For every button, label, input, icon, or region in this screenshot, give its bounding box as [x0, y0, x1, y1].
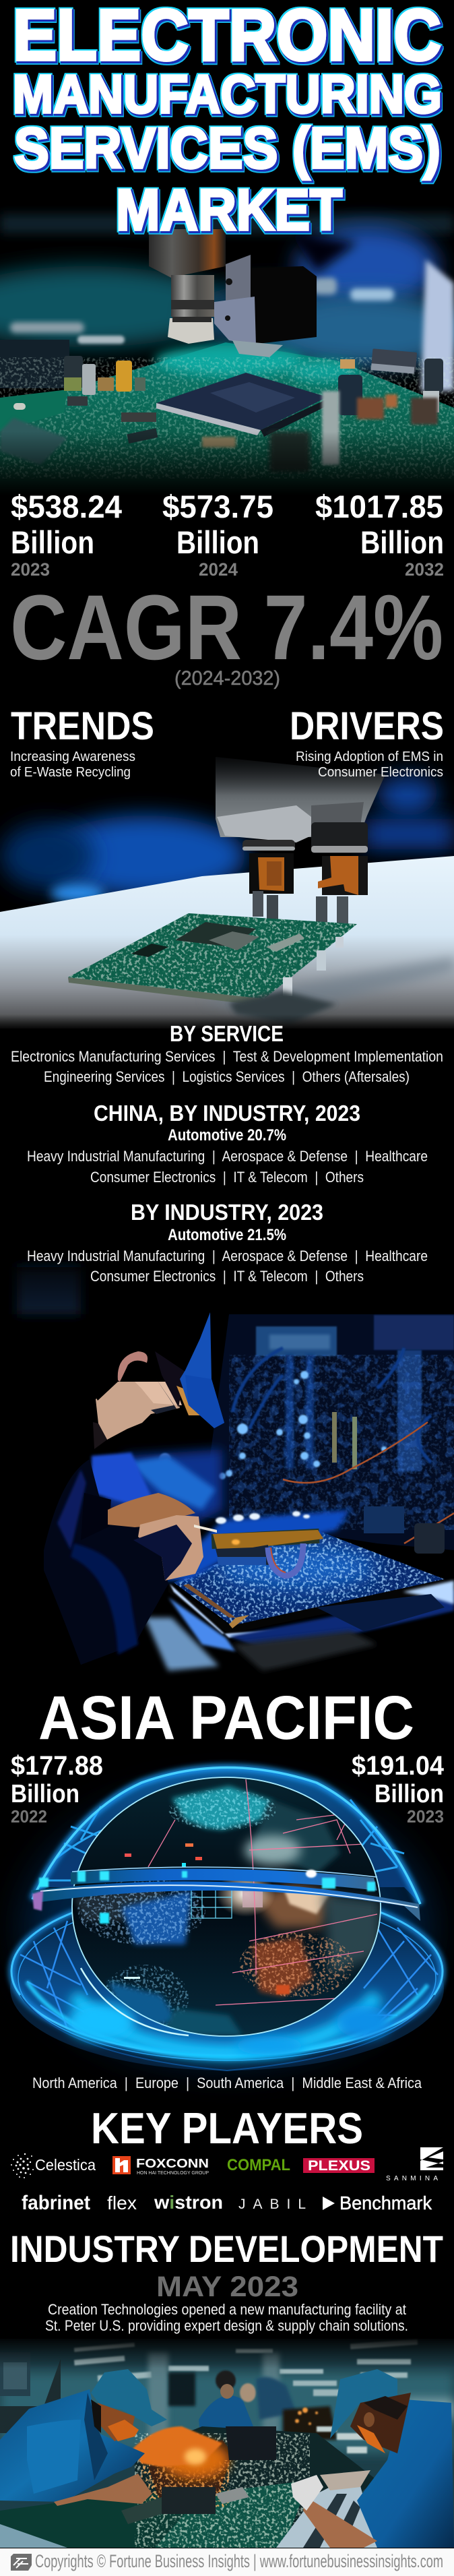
- drivers: [290, 704, 444, 780]
- stat: 2032: $1017.85: [315, 489, 443, 524]
- photo: pick and place robot: [0, 741, 454, 1035]
- logo: Wistron: wistron: [154, 2192, 223, 2213]
- stat: 2024: 2024: [199, 559, 238, 580]
- logo: Celestica: [11, 2153, 96, 2178]
- stat: 2023: Billion: [11, 524, 94, 560]
- logo: Celestica: Celestica: [35, 2156, 96, 2174]
- panel: market size stats: [11, 489, 444, 580]
- panel: China by industry: CHINA, BY INDUSTRY, 2023: [94, 1101, 360, 1126]
- trends: of E-Waste Recycling: [10, 764, 131, 780]
- title: [13, 0, 442, 243]
- panel: by service: [11, 1021, 443, 1085]
- photo: technician soldering glowing circuit board: [0, 1267, 454, 1695]
- drivers: Rising Adoption of EMS in: [296, 749, 443, 764]
- stat: 2024: Billion: [176, 524, 259, 560]
- panel: China by industry: Automotive 20.7%: [168, 1126, 286, 1144]
- drivers: Consumer Electronics: [318, 764, 443, 780]
- logo: Foxconn: [112, 2156, 209, 2176]
- panel: China by industry: [27, 1101, 428, 1186]
- stat: 2023: $538.24: [11, 489, 122, 524]
- trends: Increasing Awareness: [10, 749, 135, 764]
- title: MARKET: [116, 178, 342, 243]
- stat: 2032: [315, 489, 444, 580]
- stat: Asia Pacific 2022: $177.88: [11, 1751, 103, 1781]
- date: May 2023: MAY 2023: [156, 2271, 298, 2303]
- text: development description: Creation Technologies opened a new manufacturing facility at: [48, 2301, 407, 2318]
- trends: TRENDS: [11, 704, 154, 748]
- panel: by industry: Automotive 21.5%: [168, 1226, 286, 1244]
- stat: 2023: [11, 489, 122, 580]
- logo: Benchmark: Benchmark: [339, 2192, 432, 2213]
- heading: Asia Pacific: ASIA PACIFIC: [38, 1684, 414, 1752]
- footer bar: [0, 2548, 454, 2576]
- stat: Asia Pacific 2023: Billion: [375, 1780, 444, 1808]
- logo: Sanmina: SANMINA: [386, 2175, 438, 2182]
- panel: by industry: Consumer Electronics | IT & Telecom | Others: [90, 1268, 364, 1285]
- panel: by industry: BY INDUSTRY, 2023: [131, 1200, 323, 1225]
- logo: Fabrinet: fabrinet: [22, 2192, 90, 2214]
- text: development description: [45, 2301, 408, 2334]
- stat: 2032: 2032: [405, 559, 444, 580]
- heading: key players: KEY PLAYERS: [91, 2104, 363, 2153]
- stat: Asia Pacific 2022: Billion: [11, 1780, 79, 1808]
- stat: 2023: 2023: [11, 559, 50, 580]
- trends: [10, 704, 154, 780]
- stat: Asia Pacific 2022: 2022: [11, 1806, 47, 1827]
- panel: by service: BY SERVICE: [170, 1021, 284, 1046]
- stat: Asia Pacific 2022: [11, 1751, 103, 1827]
- panel: China by industry: Consumer Electronics | IT & Telecom | Others: [90, 1169, 364, 1186]
- illustration: digital globe in rings: [10, 1767, 444, 2071]
- panel: by industry: [27, 1200, 428, 1285]
- panel: key player logos: [11, 2147, 443, 2214]
- stat: 2024: [162, 489, 273, 580]
- stat: 2024: $573.75: [162, 489, 273, 524]
- logo: Foxconn: HON HAI TECHNOLOGY GROUP: [137, 2170, 209, 2176]
- stat: Asia Pacific 2023: $191.04: [352, 1751, 445, 1781]
- logo: Compal: COMPAL: [227, 2156, 290, 2174]
- logo: Sanmina: [386, 2147, 443, 2182]
- stat: Asia Pacific 2023: 2023: [407, 1806, 444, 1827]
- CAGR figure: (2024-2032): [174, 667, 280, 689]
- logo: Jabil: JABIL: [238, 2197, 306, 2212]
- logo: Plexus: PLEXUS: [308, 2158, 370, 2174]
- logo: Foxconn: FOXCONN: [136, 2157, 209, 2170]
- footer logo: [11, 2554, 32, 2571]
- photo: factory workers assembling circuit boards: [0, 2336, 454, 2548]
- logo: Flex: flex: [107, 2192, 137, 2213]
- photo: soldering head over circuit board: [0, 214, 454, 495]
- stat: Asia Pacific 2023: [352, 1751, 445, 1827]
